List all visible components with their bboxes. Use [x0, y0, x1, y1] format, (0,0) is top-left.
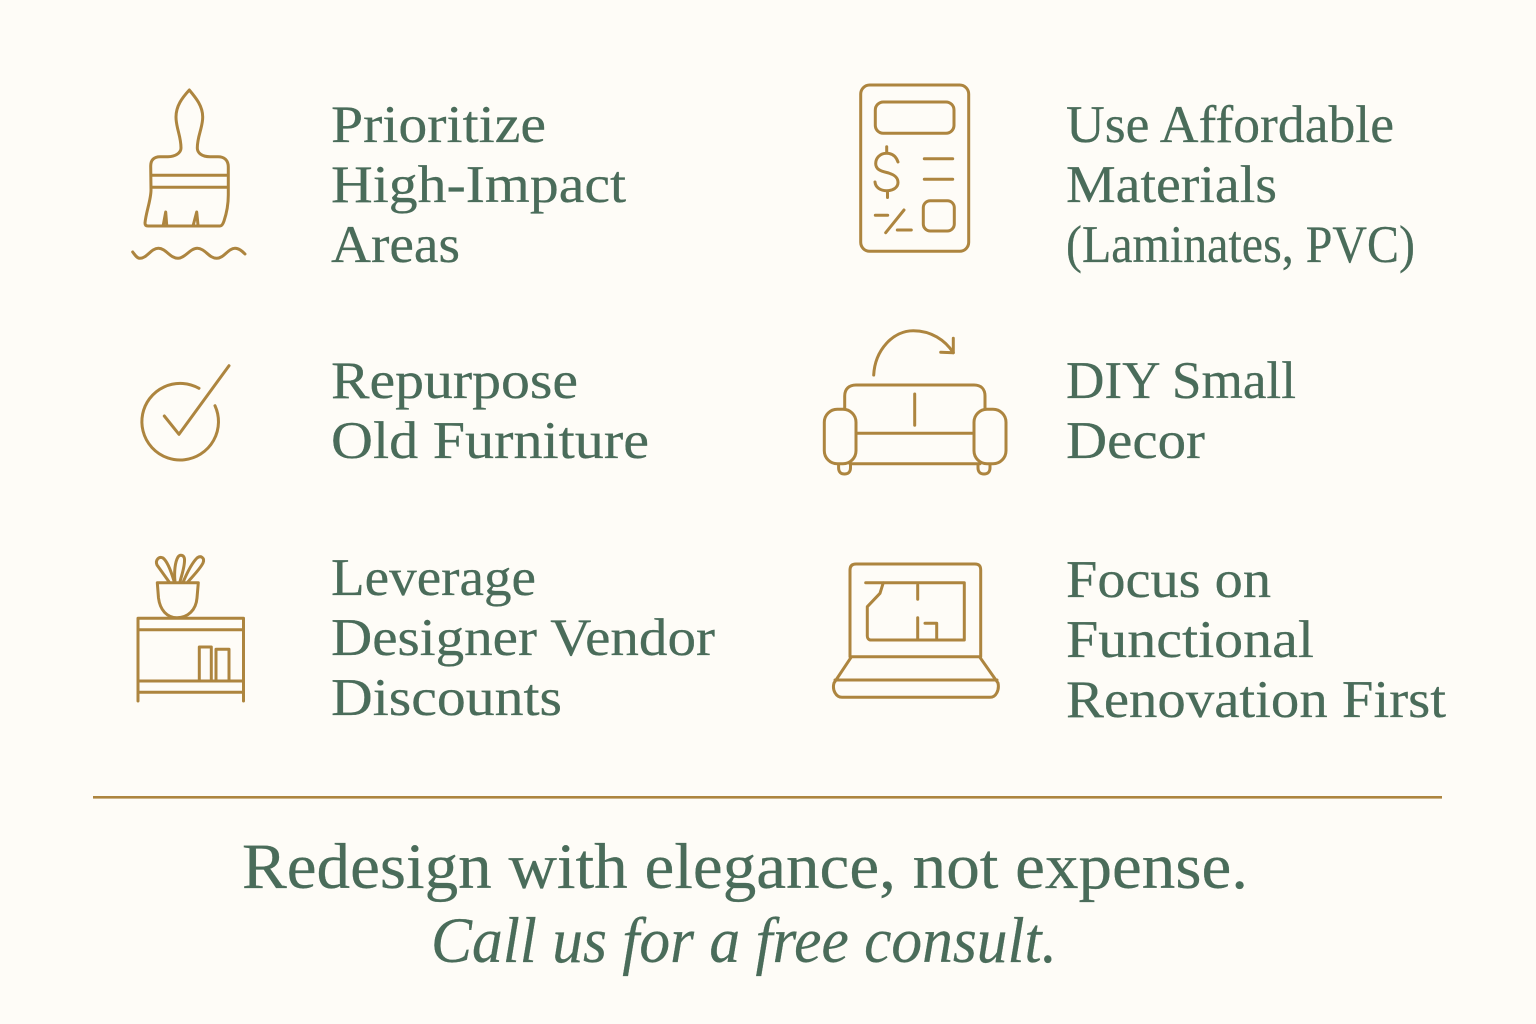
heading: prioritize high-impact areas: Areas	[331, 216, 460, 274]
heading: leverage designer vendor discounts	[331, 549, 715, 727]
heading: leverage designer vendor discounts: Designer Vendor	[331, 609, 715, 667]
icon: sofa with curved arrow	[824, 331, 1006, 474]
tip: leverage designer vendor discounts	[138, 549, 715, 727]
icon: laptop with floor plan	[833, 564, 998, 697]
heading: focus on functional renovation first: Functional	[1066, 611, 1314, 669]
heading: focus on functional renovation first	[1066, 551, 1446, 729]
heading: prioritize high-impact areas: High-Impact	[331, 156, 626, 214]
icon: check mark in circle	[142, 366, 229, 460]
tip: prioritize high-impact areas	[133, 90, 626, 274]
heading: leverage designer vendor discounts: Leverage	[331, 549, 536, 607]
heading: leverage designer vendor discounts: Discounts	[331, 669, 562, 727]
tip: repurpose old furniture	[142, 352, 649, 470]
heading: repurpose old furniture: Old Furniture	[331, 412, 649, 470]
tagline: call us for a free consult: Call us for a free consult.	[431, 905, 1057, 977]
heading: use affordable materials: (Laminates, PVC)	[1066, 216, 1415, 274]
icon: paint brush	[133, 90, 245, 258]
tip: use affordable materials	[861, 85, 1415, 274]
heading: focus on functional renovation first: Focus on	[1066, 551, 1271, 609]
tip: diy small decor	[824, 331, 1296, 474]
heading: use affordable materials: Materials	[1066, 156, 1277, 214]
icon: plant on shelf	[138, 555, 244, 701]
icon: budget calculator	[861, 85, 969, 251]
heading: repurpose old furniture: Repurpose	[331, 352, 578, 410]
heading: repurpose old furniture	[331, 352, 649, 470]
headline: redesign with elegance: Redesign with elegance, not expense.	[242, 831, 1248, 903]
heading: prioritize high-impact areas	[331, 96, 626, 274]
call to action	[242, 831, 1248, 977]
heading: diy small decor: DIY Small	[1066, 352, 1296, 410]
heading: diy small decor: Decor	[1066, 412, 1205, 470]
heading: use affordable materials: Use Affordable	[1066, 96, 1394, 154]
heading: focus on functional renovation first: Renovation First	[1066, 671, 1446, 729]
heading: diy small decor	[1066, 352, 1296, 470]
heading: prioritize high-impact areas: Prioritize	[331, 96, 546, 154]
tip: focus on functional renovation first	[833, 551, 1446, 729]
heading: use affordable materials	[1066, 96, 1415, 274]
